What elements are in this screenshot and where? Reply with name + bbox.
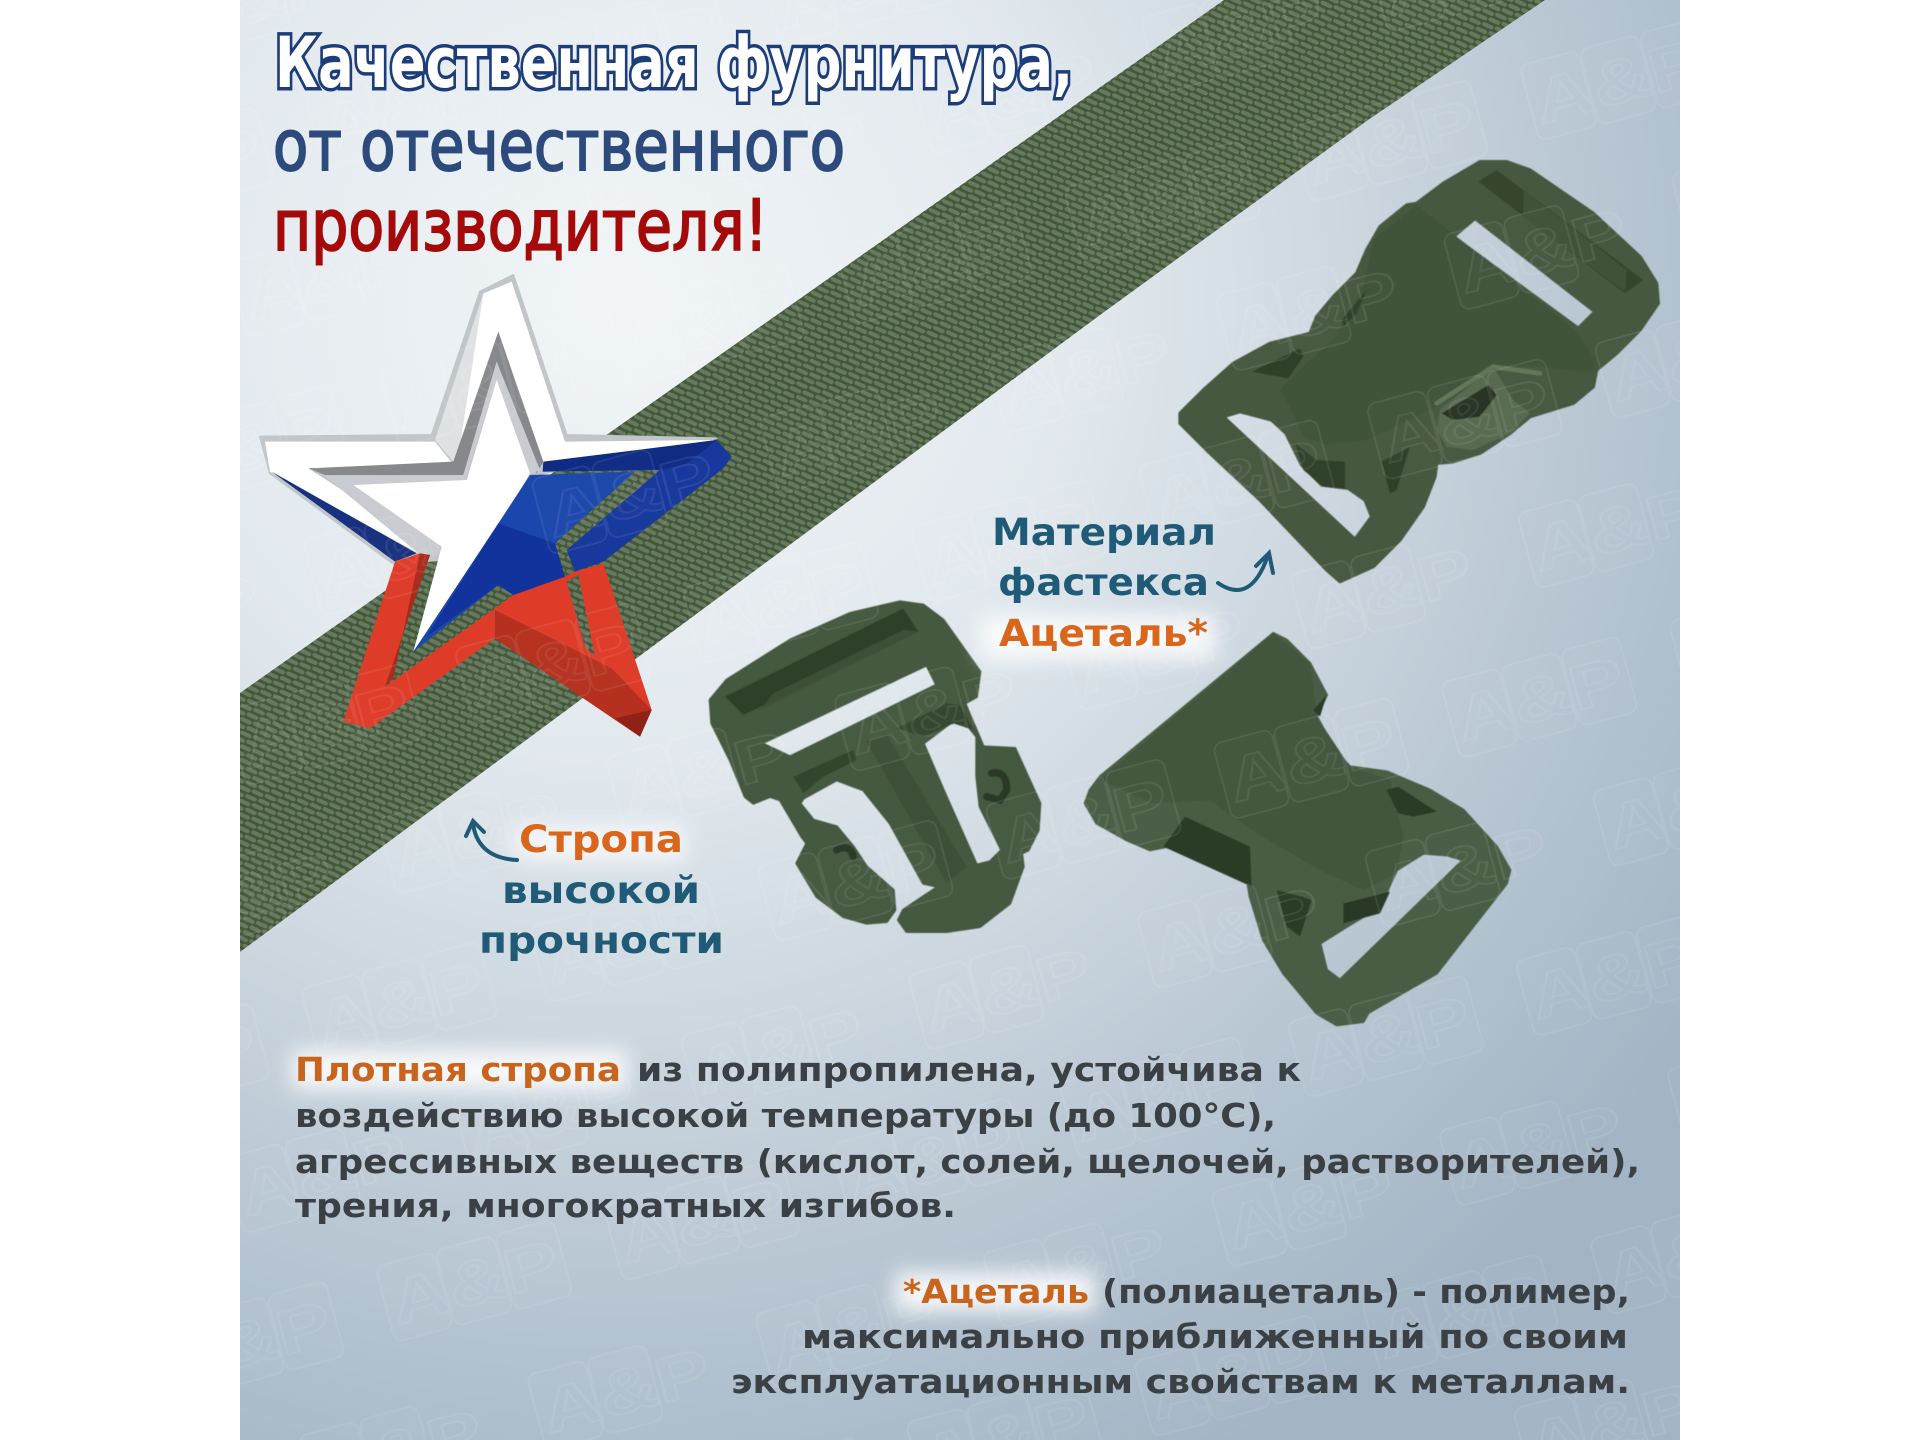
female part: dark slot	[1163, 817, 1252, 887]
buckle: assembled fastener	[1180, 162, 1658, 582]
male part: recesses	[793, 703, 973, 793]
watermark: A&P pattern	[240, 0, 1680, 1440]
icon: tricolor star	[260, 275, 732, 737]
male part: hook gaps	[837, 773, 1007, 857]
label line 3: Ацеталь*	[999, 612, 1208, 655]
star: gray back outline	[260, 275, 717, 565]
line 1: (полиацеталь) - полимер,	[1102, 1272, 1630, 1311]
highlighted word: *Ацеталь	[903, 1272, 1089, 1311]
glow behind Плотная стропа	[292, 1050, 627, 1090]
line 2: воздействию высокой температуры (до 100°С),	[295, 1096, 1276, 1135]
label line 2: высокой	[502, 869, 700, 912]
text block: strap description	[292, 1050, 1640, 1225]
male part: silhouette with windows	[710, 602, 1040, 932]
title line 1: Качественная фурнитура,	[275, 22, 1073, 104]
star: navy left facet	[272, 472, 417, 562]
line 4: трения, многократных изгибов.	[295, 1186, 956, 1225]
star: red lower frame	[343, 553, 652, 737]
male part: lighter slot wall	[760, 630, 918, 710]
female part: top face	[1100, 633, 1403, 890]
buckle: cutouts	[1252, 290, 1410, 493]
star: light gray bevel	[325, 362, 540, 555]
label line 3: прочности	[479, 919, 724, 962]
line 1: из полипропилена, устойчива к	[637, 1050, 1301, 1089]
buckle: shadow opening	[1295, 443, 1345, 488]
strap: green webbing	[240, 0, 1545, 952]
buckle: male part	[710, 602, 1040, 932]
label line 2: фастекса	[998, 561, 1209, 604]
star: white left arm	[265, 442, 452, 553]
star: light top facet	[435, 293, 498, 462]
label line 1: Материал	[992, 511, 1216, 554]
arrow to buckle	[1218, 553, 1273, 590]
buckle: release clip	[1437, 367, 1540, 450]
buckle: slot inner lighter wall	[1523, 190, 1627, 292]
star: white top band	[458, 282, 717, 463]
buckle: female part	[1085, 633, 1510, 1025]
label line 1: Стропа	[519, 818, 683, 861]
title	[273, 22, 1073, 267]
title line 3: производителя!	[273, 185, 768, 267]
arrow to strap	[466, 821, 517, 860]
male part: dark slot	[725, 608, 918, 715]
callout: buckle material	[980, 511, 1273, 660]
glow behind Ацеталь	[980, 615, 1215, 660]
star: inner blue	[413, 472, 635, 652]
star: dark gray bevel	[308, 332, 543, 475]
female part: silhouette with window	[1085, 633, 1510, 1025]
line 3: эксплуатационным свойствам к металлам.	[731, 1362, 1630, 1401]
line 2: максимально приближенный по своим	[802, 1317, 1628, 1356]
callout: strap	[466, 818, 724, 962]
panel: background	[240, 0, 1680, 1440]
buckle: upper dark slot	[1478, 170, 1643, 293]
glow behind Стропа	[515, 825, 685, 861]
glow behind Ацеталь	[895, 1272, 1095, 1312]
line 3: агрессивных веществ (кислот, солей, щелочей, растворителей),	[295, 1142, 1640, 1181]
highlighted phrase: Плотная стропа	[295, 1050, 621, 1089]
buckle: silhouette with windows	[1180, 162, 1658, 582]
female part: shadow opening	[1343, 892, 1390, 923]
title line 2: от отечественного	[273, 105, 845, 187]
buckle: dark centre face	[1280, 205, 1595, 445]
male part: centre channel	[867, 735, 967, 883]
star: blue outer band	[543, 440, 732, 572]
star: inner white	[353, 380, 530, 652]
text block: acetal note	[731, 1272, 1630, 1401]
female part: cutouts	[1277, 695, 1437, 937]
